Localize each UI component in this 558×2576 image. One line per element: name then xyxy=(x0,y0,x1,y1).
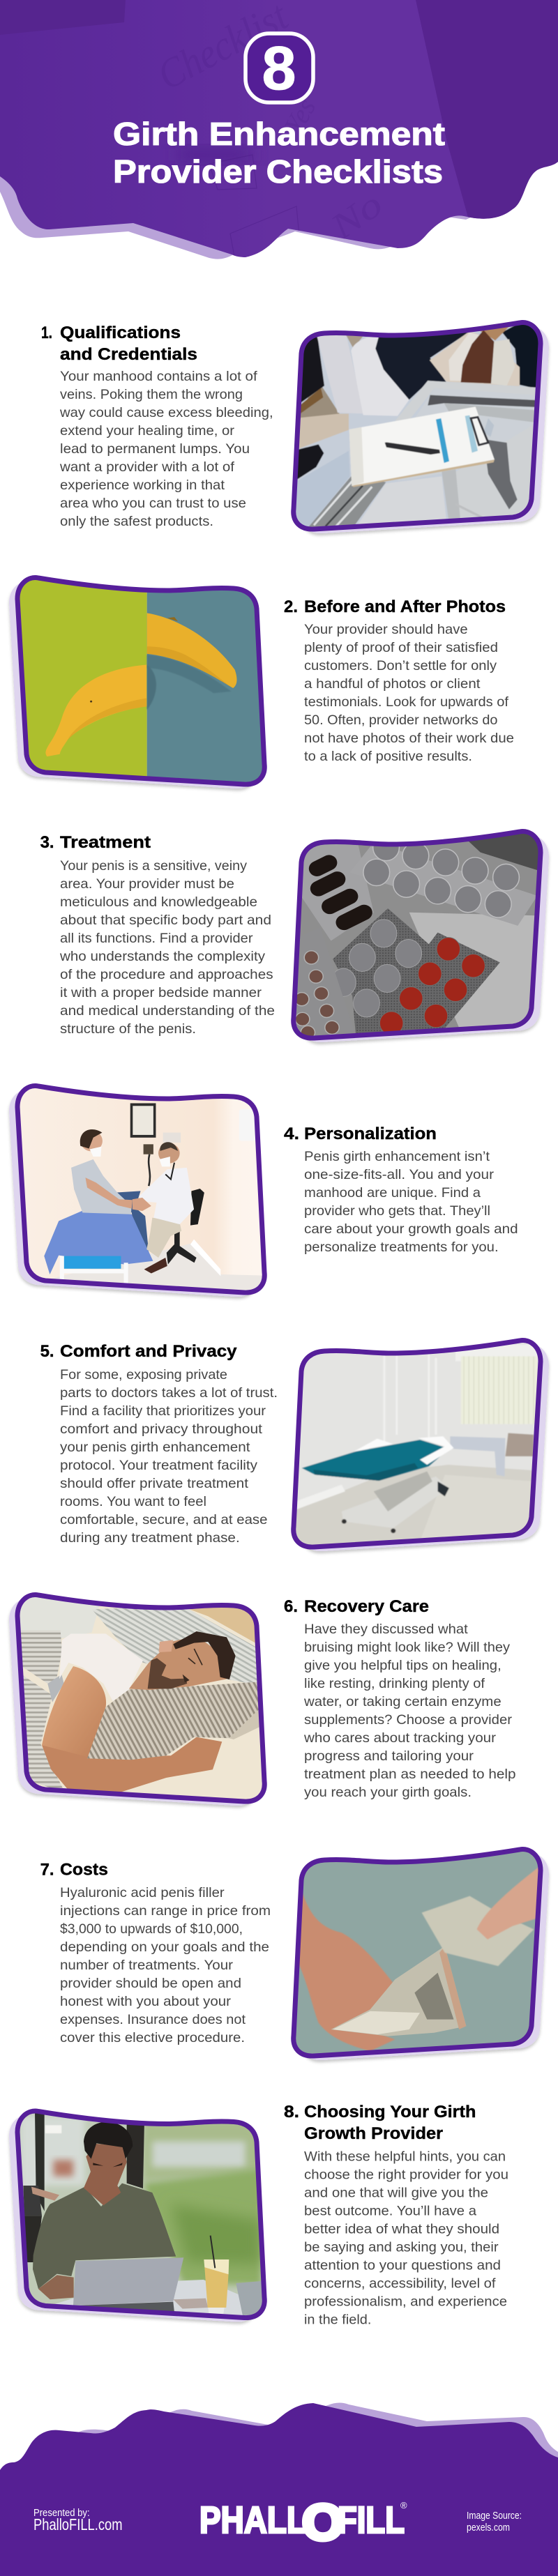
body text 8: be saying and asking you, their xyxy=(304,2239,499,2255)
photo: clipboard on glass table xyxy=(286,314,556,537)
body text 8: attention to your questions and xyxy=(304,2257,501,2273)
faint checklist marks xyxy=(209,155,299,256)
body text 3: and medical understanding of the xyxy=(60,1003,275,1019)
body text 6: supplements? Choose a provider xyxy=(304,1712,513,1728)
body text 1: way could cause excess bleeding, xyxy=(59,405,273,420)
body text 3 xyxy=(59,858,275,1037)
heading 7: Costs xyxy=(60,1860,108,1880)
body text 7: provider should be open and xyxy=(60,1976,241,1991)
body text 4: personalize treatments for you. xyxy=(304,1240,499,1255)
body text 5: parts to doctors takes a lot of trust. xyxy=(60,1385,278,1401)
heading 1: and Credentials xyxy=(60,345,197,364)
body text 2: 50. Often, provider networks do xyxy=(304,712,498,728)
photo: split banana xyxy=(8,575,267,792)
heading 1 xyxy=(41,323,197,364)
body text 3: who understands the complexity xyxy=(59,949,265,964)
section 5: comfort and privacy xyxy=(40,1332,555,1558)
body text 6: water, or taking certain enzyme xyxy=(303,1694,502,1709)
heading 4: Personalization xyxy=(304,1125,437,1143)
heading 8: Choosing Your Girth xyxy=(304,2103,476,2121)
image source: Image Source: xyxy=(467,2510,522,2522)
body text 2: not have photos of their work due xyxy=(304,731,514,746)
body text 7: cover this elective procedure. xyxy=(60,2030,245,2045)
body text 3: all its functions. Find a provider xyxy=(60,931,253,946)
heading 5: 5. xyxy=(40,1342,54,1361)
body text 8: With these helpful hints, you can xyxy=(304,2149,506,2164)
body text 6 xyxy=(303,1622,516,1800)
photo: doctor examining patient xyxy=(8,1083,267,1300)
body text 7 xyxy=(60,1885,271,2045)
heading 4: 4. xyxy=(284,1125,299,1143)
badge: number 8: 8 xyxy=(262,33,296,102)
body text 5: rooms. You want to feel xyxy=(60,1494,206,1509)
heading 3: Treatment xyxy=(60,833,151,852)
presented by: Presented by: xyxy=(33,2507,90,2519)
body text 6: bruising might look like? Will they xyxy=(304,1640,510,1655)
title xyxy=(113,116,445,190)
section 2: before and after photos xyxy=(0,566,514,800)
body text 1: only the safest products. xyxy=(60,514,213,529)
body text 3: of the procedure and approaches xyxy=(60,967,273,982)
badge: number 8 xyxy=(246,33,313,102)
body text 2: customers. Don’t settle for only xyxy=(304,658,497,673)
body text 8: better idea of what they should xyxy=(304,2221,499,2236)
section 6: recovery care xyxy=(3,1586,516,1809)
body text 1: Your manhood contains a lot of xyxy=(60,369,257,384)
footer banner xyxy=(0,2402,558,2576)
heading 1: 1. xyxy=(41,323,52,342)
body text 8: choose the right provider for you xyxy=(304,2167,508,2182)
body text 6: progress and tailoring your xyxy=(304,1748,474,1764)
body text 6: Have they discussed what xyxy=(304,1622,468,1637)
image source xyxy=(467,2510,522,2533)
body text 4: care about your growth goals and xyxy=(304,1221,518,1237)
body text 7: expenses. Insurance does not xyxy=(60,2012,246,2027)
footer purple shape xyxy=(0,2403,558,2576)
body text 1: lead to permanent lumps. You xyxy=(60,441,250,457)
body text 4: one-size-fits-all. You and your xyxy=(304,1167,495,1182)
section 1: qualifications xyxy=(41,314,556,537)
photo: man working on laptop outdoors xyxy=(3,2102,273,2325)
body text 5: during any treatment phase. xyxy=(60,1530,240,1546)
body text 4: Penis girth enhancement isn’t xyxy=(304,1149,490,1164)
body text 7: Hyaluronic acid penis filler xyxy=(60,1885,225,1900)
body text 7: depending on your goals and the xyxy=(60,1939,269,1955)
body text 5: comfortable, secure, and at ease xyxy=(60,1512,268,1527)
body text 5: should offer private treatment xyxy=(60,1476,249,1491)
heading 3: 3. xyxy=(40,833,54,852)
body text 4 xyxy=(304,1149,518,1255)
body text 5: your penis girth enhancement xyxy=(60,1440,250,1455)
section 8: choosing your provider xyxy=(3,2102,508,2327)
body text 1: experience working in that xyxy=(60,478,225,493)
heading 1: Qualifications xyxy=(60,323,181,342)
header banner xyxy=(0,0,558,272)
body text 1: extend your healing time, or xyxy=(60,423,235,439)
body text 1: veins. Poking them the wrong xyxy=(60,387,243,402)
body text 3: area. Your provider must be xyxy=(60,876,234,892)
presented by: PhalloFILL.com xyxy=(33,2515,123,2533)
heading 2: Before and After Photos xyxy=(304,597,506,616)
section 4: personalization xyxy=(0,1076,518,1309)
logo: PhalloFILL: PHALL xyxy=(199,2499,306,2541)
photo: hands holding dollar bills xyxy=(285,1839,555,2066)
body text 5: For some, exposing private xyxy=(60,1367,227,1382)
body text 7: $3,000 to upwards of $10,000, xyxy=(60,1921,243,1937)
photo: man sleeping on pillow xyxy=(3,1586,273,1809)
faint checklist words xyxy=(343,238,345,239)
body text 5: comfort and privacy throughout xyxy=(60,1422,263,1437)
heading 2: 2. xyxy=(284,597,298,616)
logo: PhalloFILL: FILL xyxy=(338,2499,405,2541)
heading 6: Recovery Care xyxy=(304,1597,429,1616)
body text 3: it with a proper bedside manner xyxy=(60,985,262,1000)
heading 5: Comfort and Privacy xyxy=(60,1342,237,1361)
body text 2: a handful of photos or client xyxy=(304,676,481,692)
presented by xyxy=(33,2507,123,2533)
body text 7: honest with you about your xyxy=(60,1994,232,2009)
body text 1: want a provider with a lot of xyxy=(59,459,235,475)
body text 6: who cares about tracking your xyxy=(303,1730,497,1746)
body text 6: treatment plan as needed to help xyxy=(304,1767,516,1782)
header purple background xyxy=(0,0,558,272)
body text 6: like resting, drinking plenty of xyxy=(304,1676,485,1691)
body text 8: and one that will give you the xyxy=(304,2185,488,2200)
body text 7: number of treatments. Your xyxy=(60,1958,234,1973)
body text 2: to a lack of positive results. xyxy=(304,749,472,764)
heading 6: 6. xyxy=(284,1597,298,1616)
heading 7 xyxy=(40,1860,108,1880)
heading 8 xyxy=(284,2103,476,2143)
body text 8 xyxy=(304,2149,508,2327)
title: Girth Enhancement xyxy=(113,116,445,152)
logo: PhalloFILL: O xyxy=(302,2495,344,2551)
body text 1 xyxy=(59,369,273,529)
body text 4: provider who gets that. They’ll xyxy=(304,1203,490,1219)
body text 5: Find a facility that prioritizes your xyxy=(60,1403,266,1419)
body text 8: concerns, accessibility, level of xyxy=(304,2276,496,2291)
body text 2 xyxy=(304,622,514,764)
body text 2: plenty of proof of their satisfied xyxy=(304,640,498,655)
body text 8: best outcome. You’ll have a xyxy=(304,2203,476,2218)
section 7: costs xyxy=(40,1839,555,2066)
body text 7: injections can range in price from xyxy=(60,1903,271,1919)
title: Provider Checklists xyxy=(113,153,443,190)
body text 3: Your penis is a sensitive, veiny xyxy=(60,858,247,874)
body text 4: manhood are unique. Find a xyxy=(304,1185,481,1201)
body text 8: professionalism, and experience xyxy=(304,2294,507,2309)
logo: PhalloFILL: ® xyxy=(400,2500,407,2510)
logo: PhalloFILL xyxy=(199,2495,407,2551)
photo: blister packs of pills xyxy=(285,823,555,1049)
body text 6: you reach your girth goals. xyxy=(304,1785,472,1800)
image source: pexels.com xyxy=(467,2522,510,2533)
header shadow shape xyxy=(0,174,481,259)
body text 6: give you helpful tips on healing, xyxy=(304,1658,502,1673)
body text 3: meticulous and knowledgeable xyxy=(60,894,257,910)
body text 1: area who you can trust to use xyxy=(60,496,246,511)
body text 3: structure of the penis. xyxy=(60,1021,196,1037)
body text 5: protocol. Your treatment facility xyxy=(60,1458,257,1473)
body text 3: about that specific body part and xyxy=(60,913,271,928)
heading 8: 8. xyxy=(284,2103,299,2121)
faint checklist words: No xyxy=(323,185,390,248)
body text 5 xyxy=(60,1367,278,1546)
photo: treatment room with teal bed xyxy=(285,1332,555,1558)
body text 2: testimonials. Look for upwards of xyxy=(304,694,509,710)
heading 7: 7. xyxy=(40,1860,54,1880)
section 3: treatment xyxy=(40,823,555,1049)
heading 8: Growth Provider xyxy=(304,2124,443,2143)
faint checklist words: Yes xyxy=(278,93,322,139)
body text 2: Your provider should have xyxy=(304,622,468,637)
body text 8: in the field. xyxy=(304,2312,371,2327)
footer shadow shape xyxy=(77,2402,558,2482)
